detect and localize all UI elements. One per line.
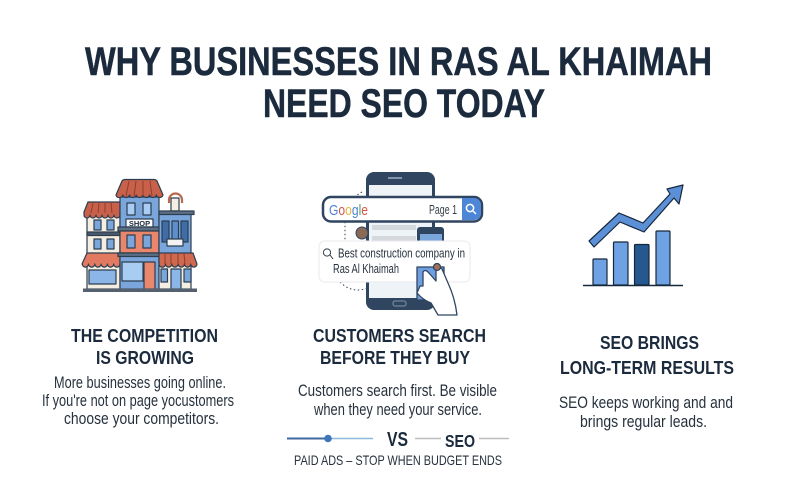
heading: THE COMPETITION [71, 325, 218, 346]
column: customers search [298, 325, 497, 419]
query text: Best construction company in [338, 246, 465, 260]
query box [319, 241, 470, 282]
left building [82, 202, 120, 289]
comparison: paid ads vs seo: SEO [445, 431, 475, 451]
phone body [366, 172, 435, 310]
search bar [323, 197, 482, 222]
comparison: paid ads vs seo [287, 429, 509, 468]
heading [560, 332, 734, 378]
body text: SEO keeps working and and [559, 394, 733, 412]
body text: choose your competitors. [64, 410, 219, 428]
body text: brings regular leads. [580, 413, 707, 431]
right building [159, 194, 197, 289]
google logo: Google [329, 202, 368, 219]
icon: shop buildings [82, 180, 197, 292]
comparison: paid ads vs seo: VS [387, 429, 408, 451]
body text [42, 374, 234, 428]
body text: If you're not on page yocustomers [42, 392, 234, 410]
icon: growth chart [583, 185, 683, 286]
heading: CUSTOMERS SEARCH [313, 325, 486, 346]
query text: Ras Al Khaimah [333, 262, 399, 276]
comparison: paid ads vs seo: PAID ADS – STOP WHEN BUDGET ENDS [294, 452, 502, 468]
title: NEED SEO TODAY [263, 82, 545, 126]
ground line [83, 288, 197, 292]
center building [116, 180, 163, 289]
shop sign: SHOP [129, 219, 150, 228]
dotted arcs [340, 192, 368, 290]
body text: when they need your service. [313, 401, 482, 419]
heading: SEO BRINGS [600, 332, 699, 353]
body text: Customers search first. Be visible [298, 382, 497, 400]
heading: IS GROWING [96, 347, 194, 368]
query text [333, 246, 465, 276]
icon: phone with google search [319, 172, 482, 315]
column: long-term results [559, 332, 734, 431]
column: competition [42, 325, 234, 428]
heading [71, 325, 218, 368]
body text [298, 382, 497, 419]
hand holding phone [417, 264, 457, 315]
body text: More businesses going online. [54, 374, 226, 392]
body text [559, 394, 733, 431]
title [85, 40, 712, 126]
heading: BEFORE THEY BUY [320, 347, 471, 368]
trend arrow [589, 185, 683, 247]
heading [313, 325, 486, 368]
heading: LONG-TERM RESULTS [560, 357, 734, 378]
page label: Page 1 [429, 203, 457, 217]
bars [593, 259, 607, 285]
baseline [583, 284, 683, 286]
small phone back [417, 227, 444, 300]
